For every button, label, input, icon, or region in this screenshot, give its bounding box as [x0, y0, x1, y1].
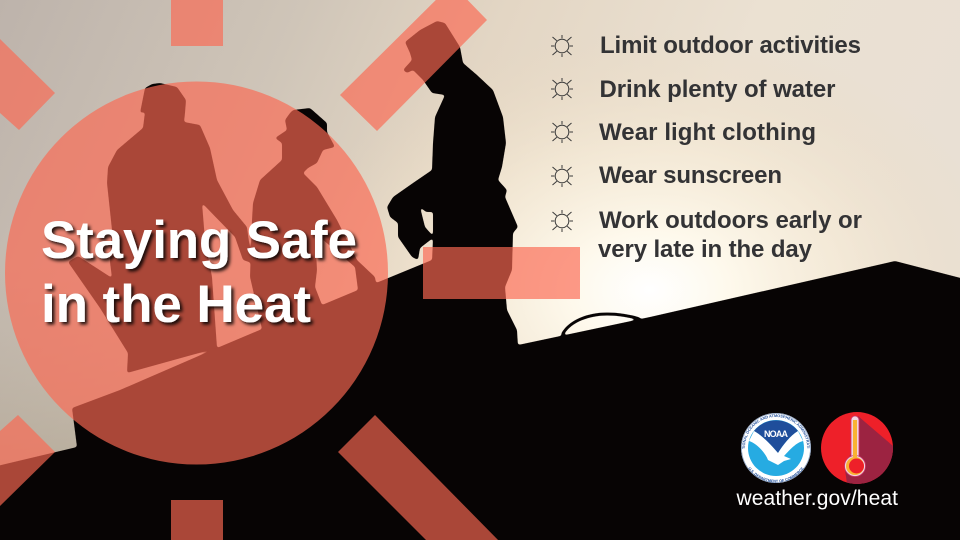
title: Staying Safe: [41, 211, 357, 270]
silhouette: rope on roof: [562, 314, 640, 335]
tip 2: Drink plenty of water: [600, 76, 836, 103]
silhouette: roof: [0, 260, 960, 540]
icon: NOAA logo: NATIONAL OCEANIC AND ATMOSPHERIC ADMINISTRATION: [742, 414, 810, 449]
website link: weather.gov/heat: [736, 487, 898, 510]
sun ray: top: [171, 0, 223, 46]
title: in the Heat: [41, 275, 311, 334]
tip 4: Wear sunscreen: [599, 162, 782, 189]
sun ray: lower left: [0, 415, 55, 506]
sun ray: upper right: [340, 0, 487, 131]
sun ray: right: [423, 247, 580, 299]
sun ray: upper left: [0, 39, 55, 130]
tip 3: Wear light clothing: [599, 119, 816, 146]
sun ray: bottom: [171, 500, 223, 540]
silhouette: right worker: [387, 21, 518, 362]
sun disc: [5, 82, 388, 464]
tips list: [551, 32, 862, 263]
sun ray: lower right: [338, 415, 502, 540]
tip 1: Limit outdoor activities: [600, 32, 861, 59]
icon: NOAA logo: [741, 413, 811, 483]
icon: NOAA logo: NOAA: [764, 429, 788, 439]
silhouette: left worker: [68, 83, 252, 373]
icon: thermometer: [821, 412, 893, 484]
tip 5: [551, 207, 862, 263]
tip 5: Work outdoors early or: [599, 207, 862, 234]
icon: NOAA logo: U.S. DEPARTMENT OF COMMERCE: [748, 466, 804, 482]
sun graphic overlay: [0, 0, 580, 540]
tip 5: very late in the day: [598, 236, 813, 263]
silhouette: middle worker: [250, 108, 377, 329]
